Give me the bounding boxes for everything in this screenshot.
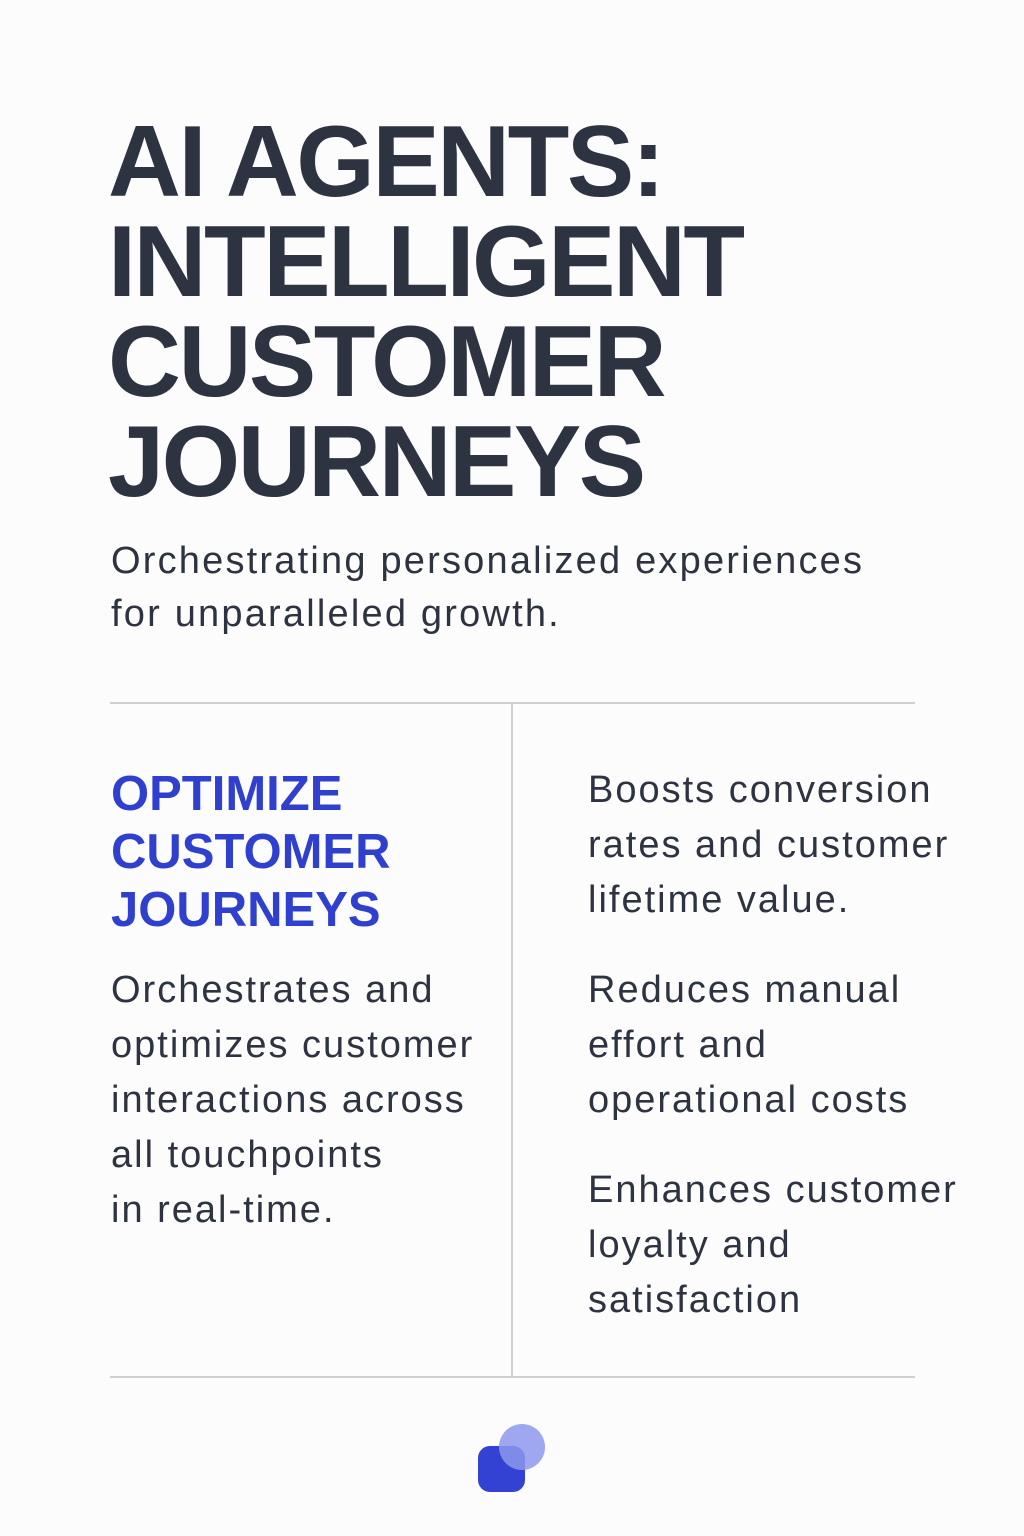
benefit 3 <box>588 1169 958 1321</box>
table frame <box>110 702 915 1378</box>
heading: optimize customer journeys: OPTIMIZE <box>111 767 342 821</box>
benefit 3: Enhances customer <box>588 1169 958 1211</box>
benefit 3: loyalty and <box>588 1224 792 1266</box>
heading: optimize customer journeys: JOURNEYS <box>111 883 381 937</box>
title <box>108 106 744 518</box>
benefit 2: Reduces manual <box>588 969 901 1011</box>
left body text: interactions across <box>111 1079 466 1121</box>
benefit 3: satisfaction <box>588 1279 802 1321</box>
benefit 1: lifetime value. <box>588 879 850 921</box>
subtitle: Orchestrating personalized experiences <box>111 540 864 582</box>
icon: logo <box>478 1424 545 1492</box>
left body text: Orchestrates and <box>111 969 434 1011</box>
title: AI AGENTS: <box>108 106 663 218</box>
benefit 2 <box>588 969 909 1121</box>
benefit 1: Boosts conversion <box>588 769 932 811</box>
left body text <box>111 969 474 1231</box>
benefit 2: effort and <box>588 1024 768 1066</box>
heading: optimize customer journeys: CUSTOMER <box>111 825 391 879</box>
subtitle <box>111 540 864 635</box>
title: INTELLIGENT <box>108 206 743 318</box>
benefit 2: operational costs <box>588 1079 909 1121</box>
benefit 1 <box>588 769 949 921</box>
subtitle: for unparalleled growth. <box>111 593 561 635</box>
title: JOURNEYS <box>108 406 644 518</box>
left body text: optimizes customer <box>111 1024 474 1066</box>
left body text: all touchpoints <box>111 1134 384 1176</box>
heading: optimize customer journeys <box>111 767 391 937</box>
benefit 1: rates and customer <box>588 824 949 866</box>
left body text: in real-time. <box>111 1189 336 1231</box>
title: CUSTOMER <box>108 306 664 418</box>
